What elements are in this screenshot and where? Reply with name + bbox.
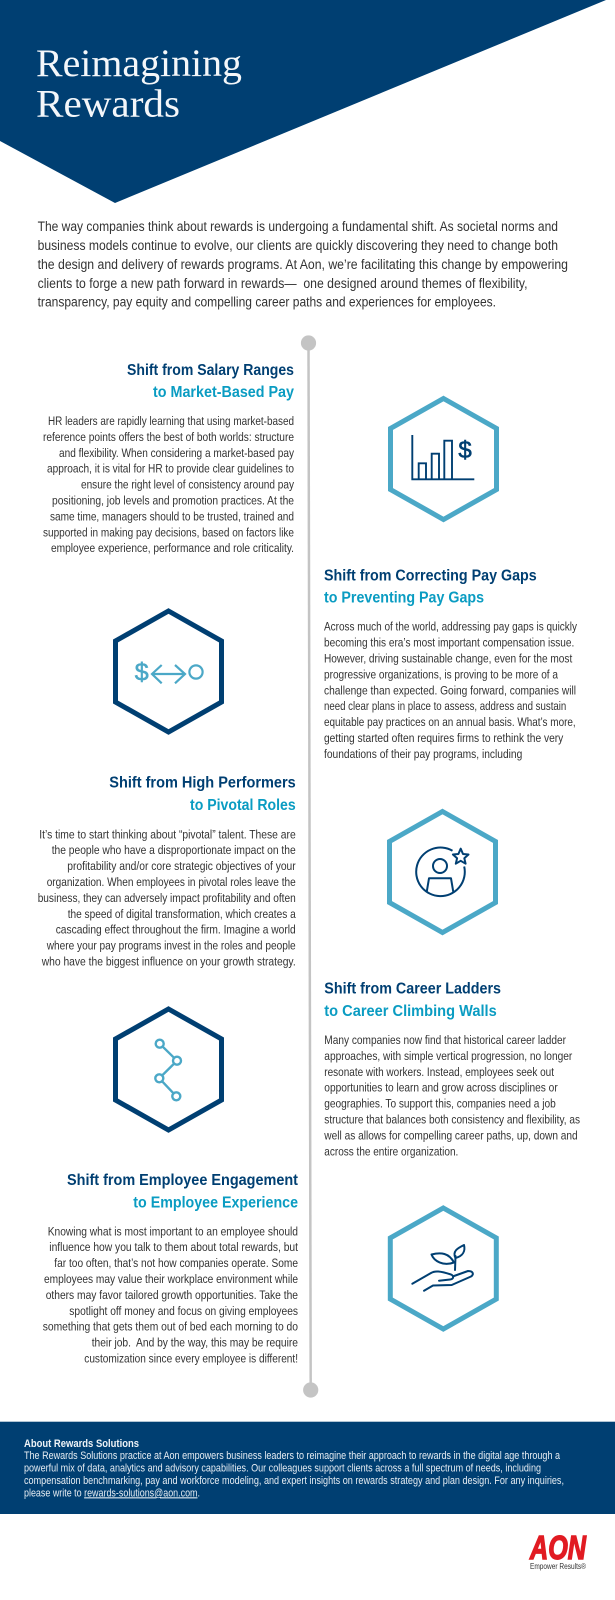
heading xyxy=(67,1172,299,1211)
heading xyxy=(109,775,296,814)
heading: Shift from Employee Engagement xyxy=(67,1172,299,1189)
body text: something that gets them out of bed each morning to do xyxy=(43,1320,298,1334)
icon: bar chart with dollar in hexagon: $ xyxy=(458,437,472,464)
body text xyxy=(323,1033,580,1158)
body text: approaches, with simple vertical progression, no longer xyxy=(324,1049,572,1063)
logo: Aon xyxy=(529,1529,587,1571)
body text: getting started often requires firms to rethink the very xyxy=(324,731,564,745)
icon: person with star in hexagon xyxy=(390,812,496,932)
body text: HR leaders are rapidly learning that using market-based xyxy=(48,414,294,428)
body text: the speed of digital transformation, which creates a xyxy=(68,907,296,921)
heading: Shift from Salary Ranges xyxy=(127,362,294,379)
heading: Shift from Correcting Pay Gaps xyxy=(324,568,537,585)
icon: connected nodes in hexagon xyxy=(116,1009,222,1130)
logo: Aon: AON xyxy=(529,1529,587,1566)
body text xyxy=(38,827,296,968)
body text: employees may value their workplace environment while xyxy=(44,1272,298,1286)
body text: others may favor tailored growth opportunities. Take the xyxy=(46,1288,298,1302)
title xyxy=(36,41,242,126)
heading: to Market-Based Pay xyxy=(153,384,294,401)
about band xyxy=(0,1422,615,1514)
header banner xyxy=(0,0,606,203)
panel: market-based pay xyxy=(43,362,295,555)
body text: who have the biggest influence on your growth strategy. xyxy=(41,954,296,968)
body text: organization. When employees in pivotal roles leave the xyxy=(47,875,296,889)
body text: supported in making pay decisions, based on factors like xyxy=(43,525,294,539)
heading: Shift from Career Ladders xyxy=(324,981,501,998)
body text: the people who have a disproportionate impact on the xyxy=(52,843,296,857)
heading: to Career Climbing Walls xyxy=(324,1003,497,1020)
icon: dollar arrow circle in hexagon: $ xyxy=(135,658,149,686)
body text: cascading effect throughout the firm. Imagine a world xyxy=(56,923,296,937)
body text: reference points offers the best of both worlds: structure xyxy=(43,430,294,444)
body text: opportunities to learn and grow across disciplines or xyxy=(324,1081,558,1095)
body text: approach, it is vital for HR to provide clear guidelines to xyxy=(47,462,294,476)
body text: ensure the right level of consistency around pay xyxy=(81,478,295,492)
body text: where your pay programs invest in the roles and people xyxy=(46,939,296,953)
intro text: transparency, pay equity and compelling career paths and experiences for employees. xyxy=(38,295,496,311)
body text: business, they can adversely impact profitability and often xyxy=(38,891,296,905)
heading: to Pivotal Roles xyxy=(190,797,296,814)
body text xyxy=(43,414,295,555)
about text xyxy=(24,1450,564,1499)
body text: Knowing what is most important to an employee should xyxy=(48,1224,298,1238)
body text: and flexibility. When considering a market-based pay xyxy=(59,446,295,460)
body text: foundations of their pay programs, including xyxy=(324,747,522,761)
body text: However, driving sustainable change, even for the most xyxy=(324,652,573,666)
heading: to Employee Experience xyxy=(133,1194,298,1211)
heading xyxy=(324,568,537,607)
heading: Shift from High Performers xyxy=(109,775,296,792)
body text: It’s time to start thinking about “pivotal” talent. These are xyxy=(39,827,296,841)
body text: positioning, job levels and promotion practices. At the xyxy=(52,494,294,508)
body text: far too often, that’s not how companies operate. Some xyxy=(54,1256,298,1270)
body text: progressive organizations, is proving to be more of a xyxy=(324,667,558,681)
body text: influence how you talk to them about total rewards, but xyxy=(49,1240,299,1254)
body text: employee experience, performance and role criticality. xyxy=(51,541,294,555)
body text xyxy=(43,1224,299,1366)
heading xyxy=(127,362,294,401)
about heading: About Rewards Solutions xyxy=(24,1438,139,1450)
icon: dollar arrow circle in hexagon xyxy=(116,611,222,732)
body text: customization since every employee is different! xyxy=(84,1352,298,1366)
title: Rewards xyxy=(36,82,180,126)
body text xyxy=(324,620,578,761)
about text: please write to rewards-solutions@aon.com. xyxy=(24,1487,200,1499)
body text: profitability and/or core strategic objectives of your xyxy=(67,859,296,873)
panel: preventing pay gaps xyxy=(324,568,578,761)
panel: career climbing walls xyxy=(323,981,580,1158)
body text: their job. And by the way, this may be require xyxy=(92,1336,298,1350)
heading: to Preventing Pay Gaps xyxy=(324,590,484,607)
body text: resonate with workers. Instead, employees seek out xyxy=(324,1065,554,1079)
body text: geographies. To support this, companies need a job xyxy=(324,1097,556,1111)
icon: hand with seedling in hexagon xyxy=(390,1208,496,1329)
title: Reimagining xyxy=(36,41,242,85)
intro text: clients to forge a new path forward in rewards— one designed around themes of flexibility, xyxy=(38,276,527,292)
panel: pivotal roles xyxy=(38,775,296,968)
panel: employee experience xyxy=(43,1172,299,1366)
body text: Many companies now find that historical career ladder xyxy=(324,1033,566,1047)
body text: across the entire organization. xyxy=(324,1144,458,1158)
intro text xyxy=(38,219,568,311)
icon: bar chart with dollar in hexagon xyxy=(390,398,496,520)
timeline xyxy=(301,335,318,1398)
heading xyxy=(324,981,501,1020)
logo: Aon: Empower Results® xyxy=(530,1562,586,1571)
body text: same time, managers should to be trusted, trained and xyxy=(50,509,294,523)
body text: spotlight off money and focus on giving employees xyxy=(69,1304,298,1318)
